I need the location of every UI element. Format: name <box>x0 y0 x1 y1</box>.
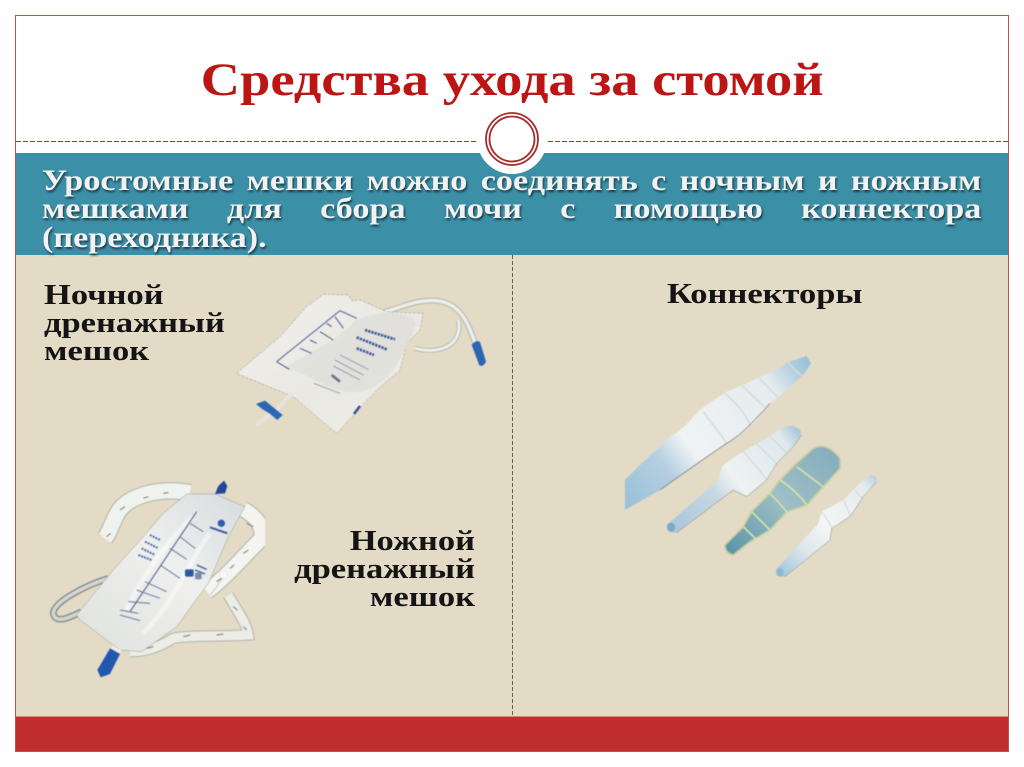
vertical dashed column divider <box>512 255 513 716</box>
connector: large <box>625 356 811 510</box>
illustration: night drainage bag <box>236 294 487 434</box>
label: leg drainage bag: дренажный <box>294 553 475 585</box>
horizontal dashed rule <box>16 141 1008 142</box>
connector: translucent green <box>725 446 840 555</box>
intro text block <box>42 164 983 257</box>
label: leg drainage bag: Ножной <box>350 525 475 557</box>
label: night drainage bag <box>44 279 225 367</box>
label: night drainage bag: мешок <box>44 335 149 367</box>
label: night drainage bag: дренажный <box>44 307 225 339</box>
red footer band <box>16 716 1008 751</box>
label: leg drainage bag <box>294 525 475 613</box>
label: leg drainage bag: мешок <box>370 581 475 613</box>
label: connectors: Коннекторы <box>667 278 862 310</box>
title: Средства ухода за стомой <box>201 54 824 106</box>
intro text block: Уростомные мешки можно соединять с ночным и ножным <box>42 164 981 197</box>
label: night drainage bag: Ночной <box>44 279 164 311</box>
illustration: connectors <box>624 356 878 578</box>
emblem: double ring circle <box>478 112 546 174</box>
connector: medium <box>667 426 802 533</box>
teal text band <box>16 153 1008 255</box>
beige content panel <box>16 255 1008 716</box>
intro text block: мешками для сбора мочи с помощью коннектора <box>42 192 981 225</box>
illustration: leg drainage bag <box>50 480 266 678</box>
intro text block: (переходника). <box>42 221 267 254</box>
connector: small <box>776 475 877 577</box>
